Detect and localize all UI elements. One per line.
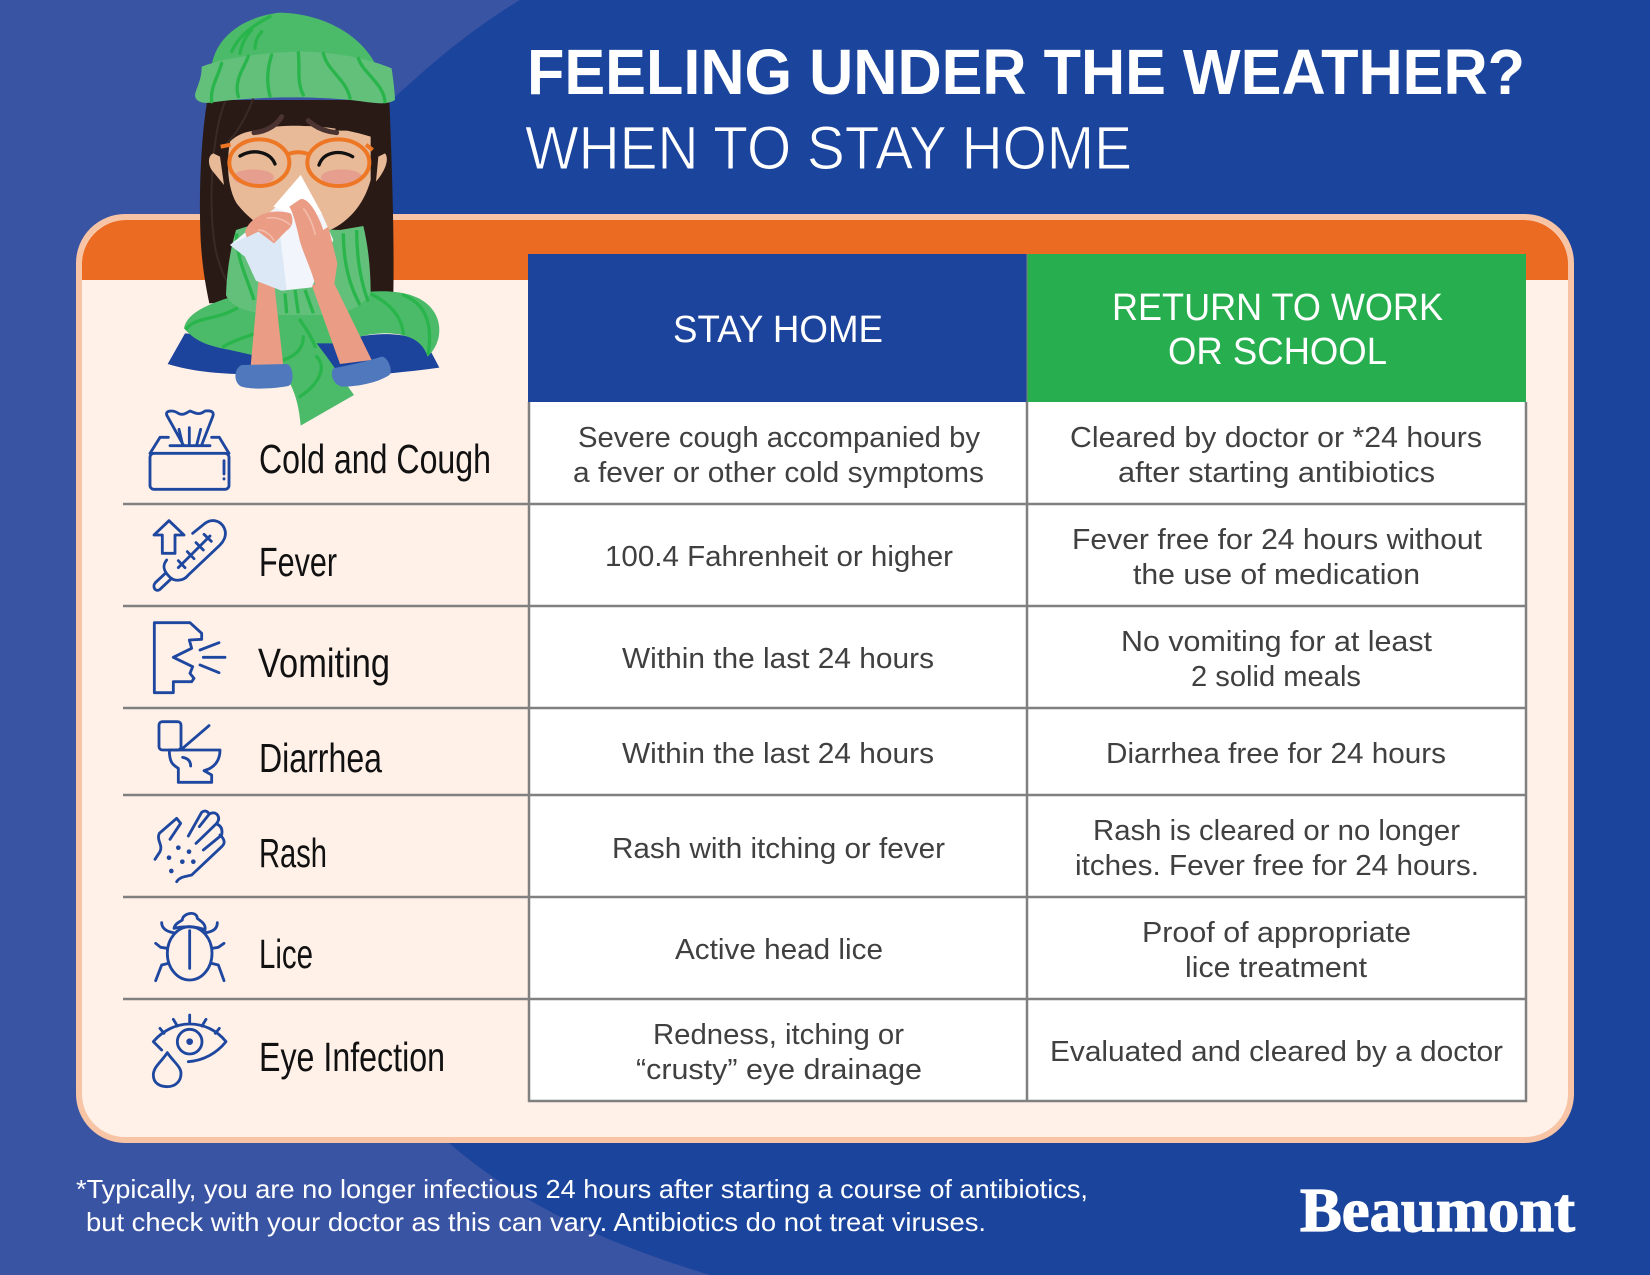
footnote xyxy=(76,1174,1088,1237)
panel: symptom card xyxy=(79,217,1571,1140)
stay home: cold and cough: a fever or other cold symptoms xyxy=(573,457,984,489)
return: vomiting: 2 solid meals xyxy=(1191,661,1361,693)
return: cold and cough: after starting antibiotics xyxy=(1118,457,1435,489)
table body xyxy=(123,402,1527,1102)
subtitle: WHEN TO STAY HOME xyxy=(525,114,1132,182)
stay home: eye infection: “crusty” eye drainage xyxy=(636,1054,922,1086)
row: diarrhea xyxy=(159,722,1446,782)
stay home: eye infection xyxy=(636,1019,922,1086)
label: lice: Lice xyxy=(259,931,313,977)
row: eye infection xyxy=(153,1015,1503,1087)
row: fever xyxy=(154,521,1482,591)
title: FEELING UNDER THE WEATHER? xyxy=(527,36,1525,108)
return: lice: lice treatment xyxy=(1185,952,1367,984)
icon: eye with tear xyxy=(153,1015,226,1087)
row: vomiting xyxy=(154,623,1432,693)
return: fever: the use of medication xyxy=(1133,559,1420,591)
label: rash: Rash xyxy=(259,830,327,876)
label: fever: Fever xyxy=(259,539,337,585)
return: lice: Proof of appropriate xyxy=(1142,917,1411,949)
icon: vomiting face xyxy=(154,623,225,693)
header: return to work or school: RETURN TO WORK xyxy=(1112,287,1443,329)
return: diarrhea: Diarrhea free for 24 hours xyxy=(1106,738,1446,770)
return: lice xyxy=(1142,917,1411,984)
row: cold and cough xyxy=(150,411,1482,489)
stay home: vomiting: Within the last 24 hours xyxy=(622,643,934,675)
label: diarrhea: Diarrhea xyxy=(259,735,382,781)
stay home: rash: Rash with itching or fever xyxy=(612,833,945,865)
stay home: fever: 100.4 Fahrenheit or higher xyxy=(605,541,953,573)
return: cold and cough xyxy=(1070,422,1482,489)
return: eye infection: Evaluated and cleared by a doctor xyxy=(1050,1036,1503,1068)
header: stay home xyxy=(528,254,1027,402)
row: rash xyxy=(155,811,1479,882)
stay home: cold and cough xyxy=(573,422,984,489)
stay home: eye infection: Redness, itching or xyxy=(653,1019,904,1051)
return: vomiting: No vomiting for at least xyxy=(1121,626,1432,658)
return: rash: Rash is cleared or no longer xyxy=(1093,815,1460,847)
stay home: cold and cough: Severe cough accompanied by xyxy=(578,422,980,454)
icon: thermometer xyxy=(154,521,225,590)
stay home: diarrhea: Within the last 24 hours xyxy=(622,738,934,770)
return: rash: itches. Fever free for 24 hours. xyxy=(1075,850,1479,882)
return: rash xyxy=(1075,815,1479,882)
label: vomiting: Vomiting xyxy=(258,640,390,686)
illustration: sneezing woman xyxy=(168,13,439,426)
label: cold and cough: Cold and Cough xyxy=(259,436,491,482)
row: lice xyxy=(156,913,1411,984)
header: return to work or school xyxy=(1027,254,1526,402)
icon: tissue box xyxy=(150,411,229,489)
icon: louse xyxy=(156,913,224,981)
stay home: lice: Active head lice xyxy=(675,934,883,966)
return: fever: Fever free for 24 hours without xyxy=(1072,524,1482,556)
return: cold and cough: Cleared by doctor or *24 hours xyxy=(1070,422,1482,454)
return: fever xyxy=(1072,524,1482,591)
footnote: but check with your doctor as this can vary. Antibiotics do not treat viruses. xyxy=(86,1207,986,1237)
footnote: *Typically, you are no longer infectious 24 hours after starting a course of antibiotics, xyxy=(76,1174,1088,1204)
icon: toilet xyxy=(159,722,220,782)
label: eye infection: Eye Infection xyxy=(259,1034,445,1080)
logo: Beaumont: Beaumont xyxy=(1300,1177,1575,1245)
return: vomiting xyxy=(1121,626,1432,693)
icon: hand with rash xyxy=(155,811,224,882)
header: stay home: STAY HOME xyxy=(673,309,883,351)
header: return to work or school: OR SCHOOL xyxy=(1168,331,1387,373)
